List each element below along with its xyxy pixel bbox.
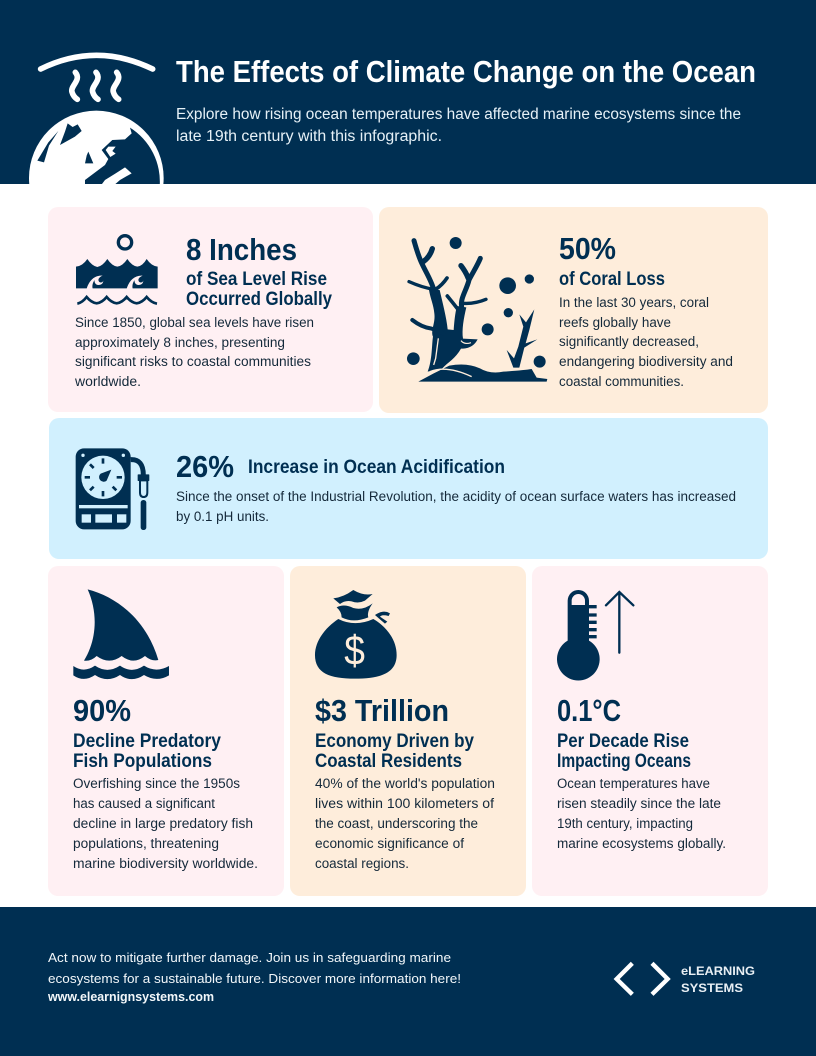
body text [557, 776, 726, 851]
subheading [186, 268, 332, 310]
subheading: Economy Driven by [315, 730, 474, 752]
body text: marine biodiversity worldwide. [73, 856, 258, 871]
icon: shark fin [73, 589, 169, 679]
logo mark [617, 963, 668, 994]
body text [73, 776, 258, 871]
body text: economic significance of [315, 836, 464, 851]
body text: 40% of the world's population [315, 776, 495, 791]
body text [559, 295, 733, 389]
body text: significantly decreased, [559, 334, 699, 349]
body text: reefs globally have [559, 315, 671, 330]
title: The Effects of Climate Change on the Ocean [176, 54, 756, 89]
body text [315, 776, 495, 871]
stat: 50%: 50% [559, 231, 616, 266]
subheading: of Sea Level Rise [186, 268, 327, 290]
subheading: of Coral Loss [559, 268, 665, 290]
stat: $3 trillion: $3 Trillion [315, 693, 449, 728]
stat: 26%: 26% [176, 449, 234, 484]
icon: heated globe [29, 52, 164, 184]
body text: the coast, underscoring the [315, 816, 478, 831]
body text: Since the onset of the Industrial Revolution, the acidity of ocean surface waters has increased [176, 489, 736, 504]
body text [176, 489, 736, 524]
logo text: eLEARNING [681, 964, 755, 978]
subheading: Per Decade Rise [557, 730, 689, 752]
subheading: Increase in Ocean Acidification [248, 456, 505, 478]
body text [74, 315, 314, 389]
body text: endangering biodiversity and [559, 354, 733, 369]
stat: 0.1°C: 0.1°C [557, 693, 621, 728]
footer band [0, 907, 816, 1056]
body text: coastal communities. [559, 374, 684, 389]
body text: has caused a significant [73, 796, 215, 811]
body text: decline in large predatory fish [73, 816, 253, 831]
call to action [47, 950, 461, 1004]
body text: coastal regions. [315, 856, 409, 871]
subheading: Coastal Residents [315, 750, 462, 772]
body text: Ocean temperatures have [557, 776, 710, 791]
panel: ocean temperature [532, 566, 768, 896]
body text: populations, threatening [73, 836, 219, 851]
body text: lives within 100 kilometers of [315, 796, 494, 811]
panel: predatory fish [48, 566, 284, 896]
body text: Overfishing since the 1950s [73, 776, 240, 791]
logo text: SYSTEMS [681, 981, 743, 995]
body text: significant risks to coastal communities [75, 354, 311, 369]
intro text: Explore how rising ocean temperatures have affected marine ecosystems since the [176, 106, 741, 123]
body text: 19th century, impacting [557, 816, 693, 831]
subheading: Impacting Oceans [557, 750, 691, 772]
body text: Since 1850, global sea levels have risen [75, 315, 314, 330]
icon: waves and buoy [76, 236, 158, 304]
intro text [176, 106, 741, 145]
body text: by 0.1 pH units. [176, 509, 269, 524]
subheading [73, 730, 221, 772]
intro text: late 19th century with this infographic. [176, 128, 442, 145]
panel: acidification [49, 418, 768, 559]
icon: money bag: $ [344, 626, 365, 673]
subheading: Fish Populations [73, 750, 212, 772]
subheading [557, 730, 691, 772]
stat: 8 inches: 8 Inches [186, 232, 297, 267]
panel: coral loss [379, 207, 768, 413]
panel: sea level rise [48, 207, 373, 412]
logo text [681, 964, 755, 995]
icon: pH meter [76, 448, 149, 530]
header band [0, 0, 816, 184]
icon: thermometer with arrow [557, 590, 633, 680]
icon: money bag [315, 590, 397, 679]
body text: worldwide. [74, 374, 141, 389]
body text: risen steadily since the late [557, 796, 721, 811]
call to action: Act now to mitigate further damage. Join us in safeguarding marine [48, 950, 451, 965]
body text: approximately 8 inches, presenting [75, 335, 285, 350]
call to action: ecosystems for a sustainable future. Discover more information here! [48, 971, 461, 986]
call to action: www.elearnignsystems.com [47, 989, 214, 1004]
panel: coastal economy [290, 566, 526, 896]
subheading: Decline Predatory [73, 730, 221, 752]
body text: In the last 30 years, coral [559, 295, 709, 310]
body text: marine ecosystems globally. [557, 836, 726, 851]
icon: coral [407, 237, 547, 382]
subheading [315, 730, 474, 772]
subheading: Occurred Globally [186, 288, 332, 310]
stat: 90%: 90% [73, 693, 131, 728]
